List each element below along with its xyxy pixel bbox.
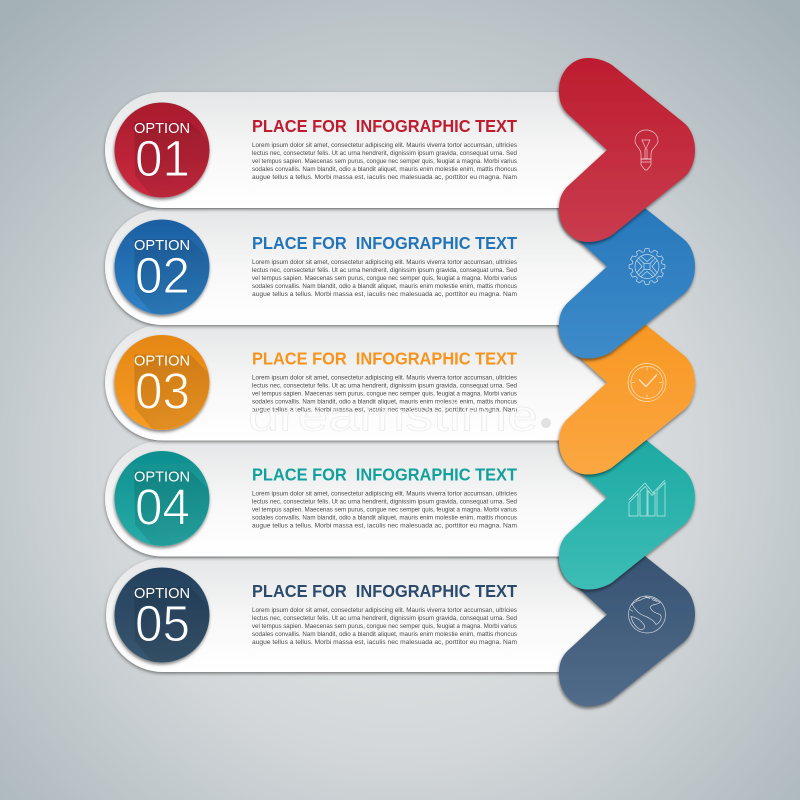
text block 01: [252, 116, 518, 181]
text block 02: PLACE FOR INFOGRAPHIC TEXT: [252, 233, 517, 253]
strip 03: [105, 324, 607, 440]
text block 04: [252, 464, 518, 530]
text block 02: lectus nec, consectetur felis. Ut ac urna hendrerit, dignissim ipsum gravida, consequat urna. Sed: [252, 267, 517, 274]
text block 01: augue tellus a tellus. Morbi massa est, iaculis nec malesuada ac, porttitor eu magna. Nam: [252, 174, 518, 181]
text block 03: augue tellus a tellus. Morbi massa est, iaculis nec malesuada ac, porttitor eu magna. Nam: [252, 406, 518, 414]
icon: bar chart: [629, 480, 665, 516]
text block 01: Lorem ipsum dolor sit amet, consectetur adipiscing elit. Mauris viverra tortor accumsan, ultricies: [252, 142, 518, 149]
text block 03: PLACE FOR INFOGRAPHIC TEXT: [252, 348, 517, 368]
text block 01: sodales convallis. Nam blandit, odio a blandit aliquet, mauris enim molestie enim, mattis rhoncus: [252, 166, 518, 173]
panel: option 02: [102, 209, 606, 329]
text block 02: sodales convallis. Nam blandit, odio a blandit aliquet, mauris enim molestie enim, mattis rhoncus: [252, 283, 518, 290]
icon: gear: [629, 248, 665, 285]
panel: option 04: [102, 440, 606, 560]
text block 04: Lorem ipsum dolor sit amet, consectetur adipiscing elit. Mauris viverra tortor accumsan, ultricies: [252, 490, 518, 498]
panel: option 05: [104, 558, 606, 676]
text block 03: lectus nec, consectetur felis. Ut ac urna hendrerit, dignissim ipsum gravida, consequat urna. Sed: [252, 382, 517, 390]
text block 05: [252, 581, 518, 646]
strip 05: [106, 558, 607, 672]
text block 02: Lorem ipsum dolor sit amet, consectetur adipiscing elit. Mauris viverra tortor accumsan, ultricies: [252, 259, 518, 266]
badge 03: [112, 334, 212, 434]
badge 02: 02: [135, 247, 190, 304]
arrow: navy chevron: [559, 522, 695, 706]
badge 01: [112, 102, 212, 202]
text block 01: lectus nec, consectetur felis. Ut ac urna hendrerit, dignissim ipsum gravida, consequat urna. Sed: [252, 150, 517, 157]
arrow: red chevron: [559, 58, 695, 242]
text block 04: augue tellus a tellus. Morbi massa est, iaculis nec malesuada ac, porttitor eu magna. Nam: [252, 522, 518, 530]
text block 02: [252, 233, 518, 298]
arrow: orange chevron: [559, 290, 695, 474]
text block 03: [252, 348, 518, 414]
text block 05: vel tempus sapien. Maecenas sem purus, congue nec semper quis, feugiat a magna. Morbi varius: [252, 623, 518, 630]
badge 01: 01: [135, 130, 190, 187]
text block 04: vel tempus sapien. Maecenas sem purus, congue nec semper quis, feugiat a magna. Morbi varius: [252, 506, 518, 514]
text block 02: augue tellus a tellus. Morbi massa est, iaculis nec malesuada ac, porttitor eu magna. Nam: [252, 291, 518, 298]
text block 03: sodales convallis. Nam blandit, odio a blandit aliquet, mauris enim molestie enim, mattis rhoncus: [252, 398, 518, 406]
strip 04: [105, 440, 607, 556]
arrow: teal chevron: [559, 406, 695, 590]
text block 05: augue tellus a tellus. Morbi massa est, iaculis nec malesuada ac, porttitor eu magna. Nam: [252, 639, 518, 646]
text block 05: PLACE FOR INFOGRAPHIC TEXT: [252, 581, 517, 601]
text block 01: PLACE FOR INFOGRAPHIC TEXT: [252, 116, 517, 136]
strip 01: [105, 92, 607, 208]
text block 01: vel tempus sapien. Maecenas sem purus, congue nec semper quis, feugiat a magna. Morbi varius: [252, 158, 518, 165]
badge 03: 03: [135, 362, 190, 420]
panel: option 03: [102, 325, 606, 444]
text block 03: vel tempus sapien. Maecenas sem purus, congue nec semper quis, feugiat a magna. Morbi varius: [252, 390, 518, 398]
strip 02: [105, 209, 607, 325]
badge 01: OPTION: [134, 121, 190, 137]
arrow: blue chevron: [559, 174, 695, 358]
text block 03: Lorem ipsum dolor sit amet, consectetur adipiscing elit. Mauris viverra tortor accumsan, ultricies: [252, 374, 518, 382]
badge 05: OPTION: [134, 586, 190, 602]
text block 05: lectus nec, consectetur felis. Ut ac urna hendrerit, dignissim ipsum gravida, consequat urna. Sed: [252, 615, 517, 622]
badge 03: OPTION: [134, 354, 190, 370]
badge 04: OPTION: [134, 470, 190, 486]
icon: light bulb: [635, 130, 658, 170]
text block 04: PLACE FOR INFOGRAPHIC TEXT: [252, 464, 517, 484]
watermark: dreamstime: [248, 392, 538, 440]
icon: globe: [628, 596, 666, 633]
badge 02: [112, 219, 212, 319]
icon: clock: [628, 364, 666, 402]
badge 04: 04: [135, 478, 190, 536]
text block 05: sodales convallis. Nam blandit, odio a blandit aliquet, mauris enim molestie enim, mattis rhoncus: [252, 631, 518, 638]
badge 05: 05: [135, 595, 190, 652]
badge 02: OPTION: [134, 238, 190, 254]
panel: option 01: [102, 91, 606, 212]
text block 04: sodales convallis. Nam blandit, odio a blandit aliquet, mauris enim molestie enim, mattis rhoncus: [252, 514, 518, 522]
text block 02: vel tempus sapien. Maecenas sem purus, congue nec semper quis, feugiat a magna. Morbi varius: [252, 275, 518, 282]
badge 05: [112, 567, 212, 667]
badge 04: [112, 450, 212, 550]
text block 05: Lorem ipsum dolor sit amet, consectetur adipiscing elit. Mauris viverra tortor accumsan, ultricies: [252, 607, 518, 614]
text block 04: lectus nec, consectetur felis. Ut ac urna hendrerit, dignissim ipsum gravida, consequat urna. Sed: [252, 498, 517, 506]
